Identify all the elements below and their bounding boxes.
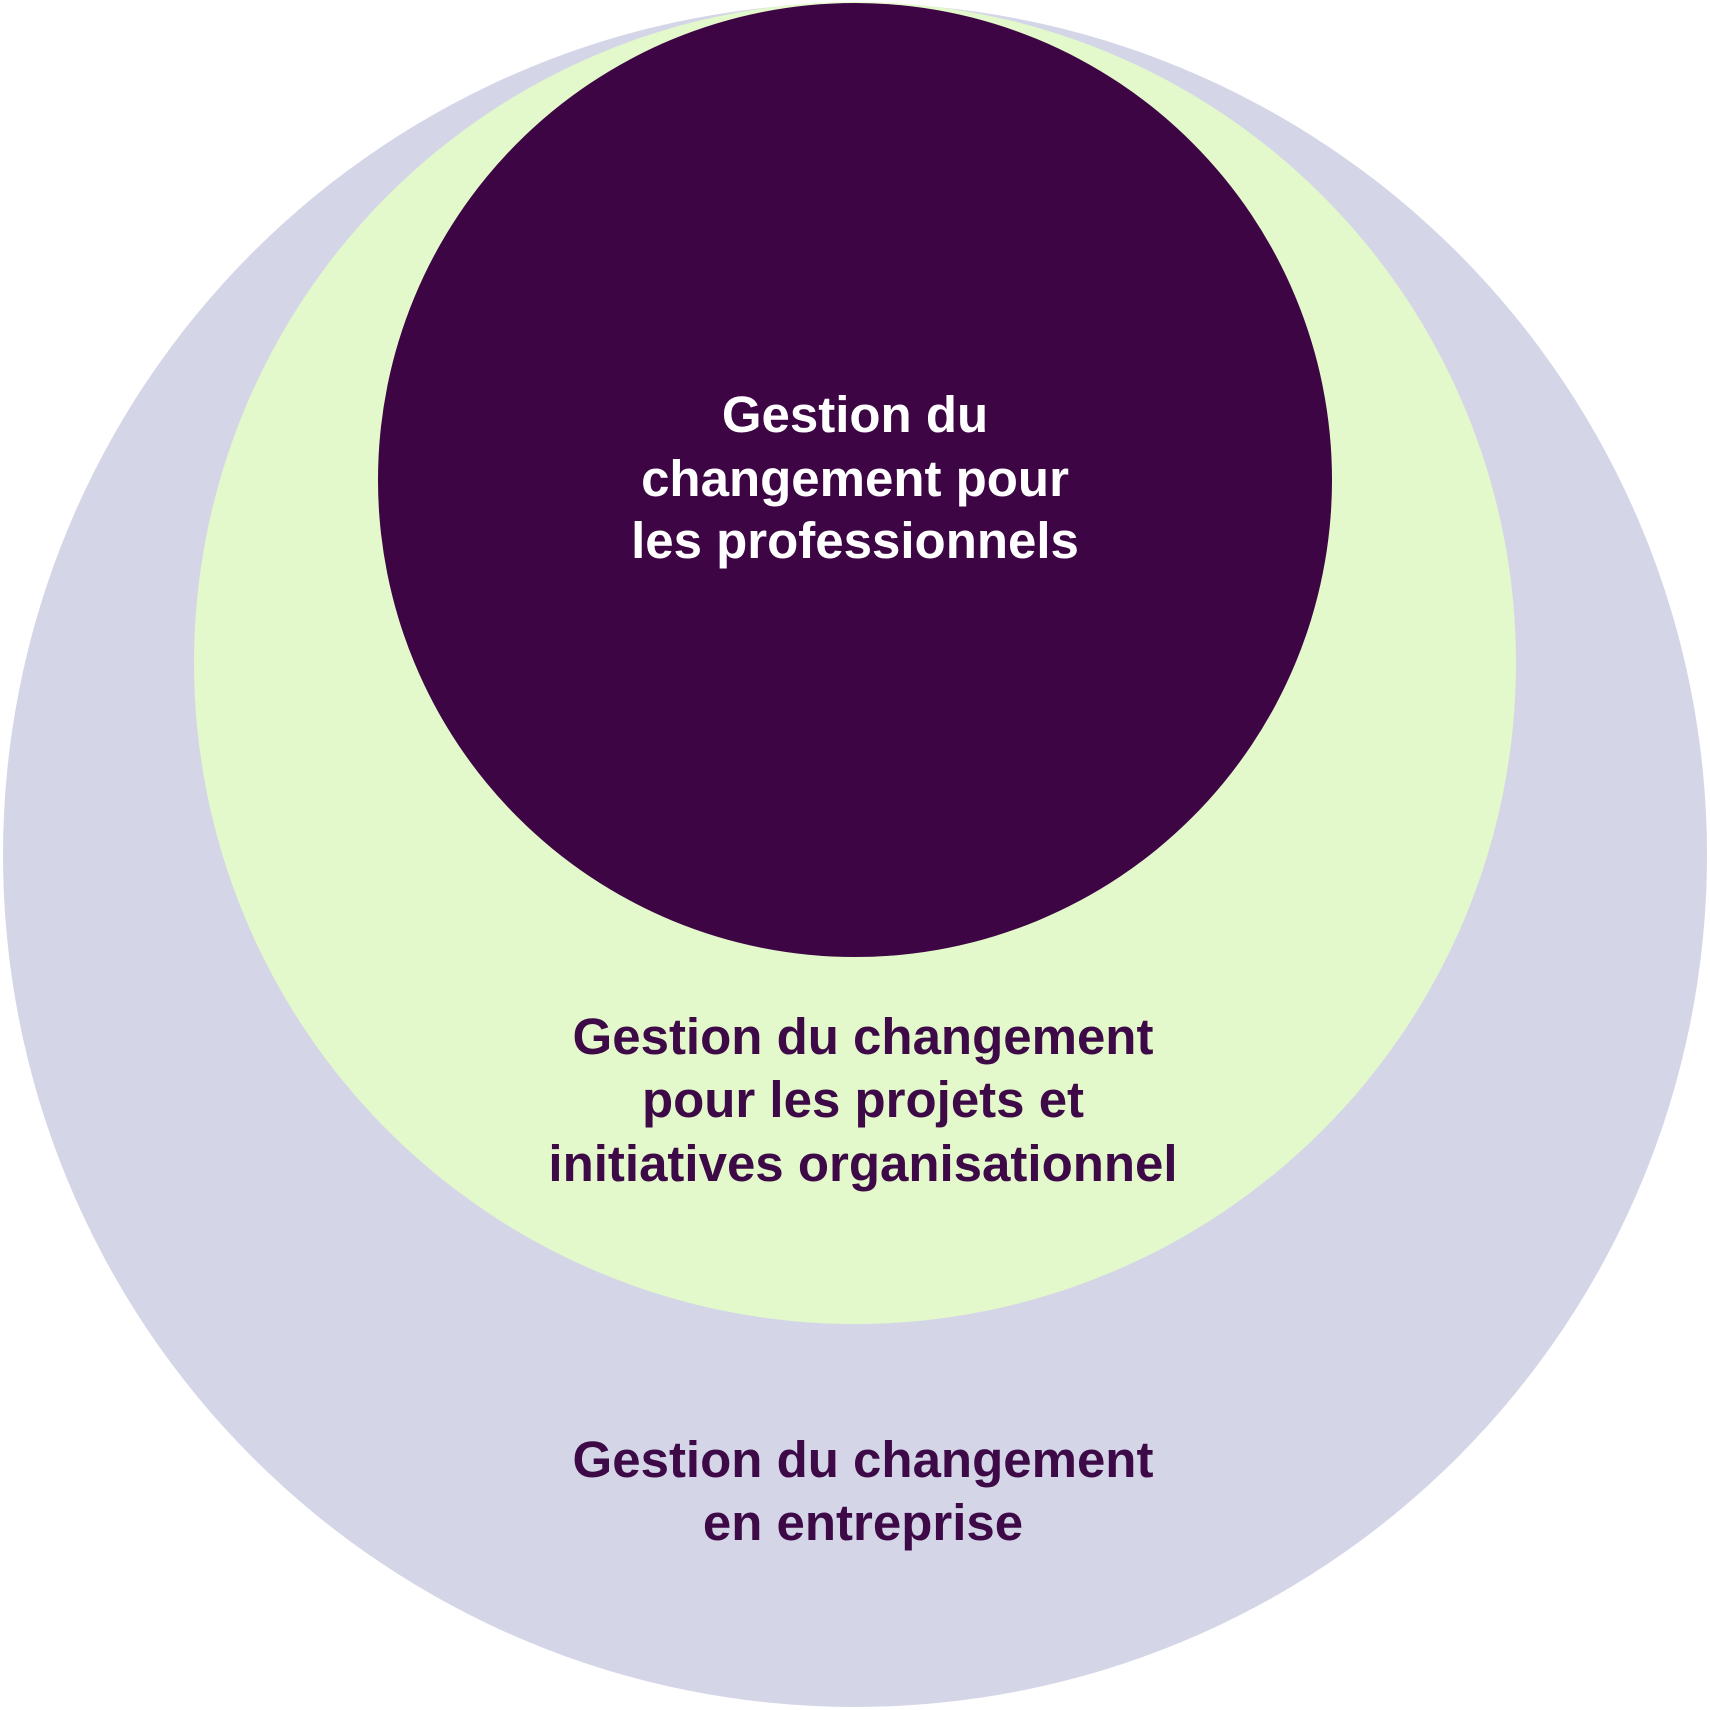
label: professionals: Gestion du: [722, 386, 988, 443]
label: projects: Gestion du changement: [573, 1008, 1153, 1065]
label: enterprise: en entreprise: [703, 1494, 1023, 1551]
label: enterprise: Gestion du changement: [573, 1431, 1153, 1488]
inner circle: professionals: [378, 3, 1332, 957]
label: projects: initiatives organisationnel: [548, 1135, 1178, 1192]
label: professionals: changement pour: [641, 450, 1069, 507]
label: projects: pour les projets et: [642, 1071, 1084, 1128]
label: professionals: les professionnels: [631, 512, 1079, 569]
middle circle: projects: [194, 2, 1516, 1324]
